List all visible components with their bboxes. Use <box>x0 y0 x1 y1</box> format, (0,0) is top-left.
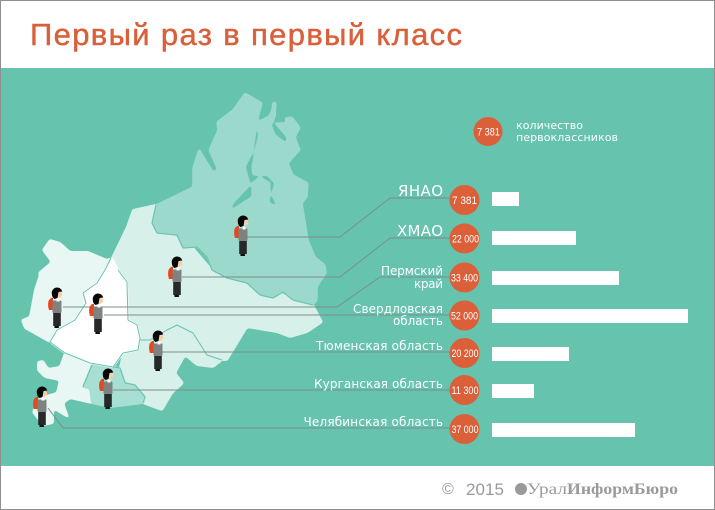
value circles <box>450 185 480 444</box>
values: 7 381 <box>452 195 477 207</box>
icon: child Тюменская область <box>149 331 163 371</box>
values: 33 400 <box>451 272 478 284</box>
values: 22 000 <box>452 234 479 246</box>
bar chart <box>492 192 688 437</box>
icon: child Свердловская область <box>89 294 103 334</box>
footer credit: 2015 <box>466 480 504 499</box>
label: Свердловская область: Свердловская <box>353 302 443 316</box>
label: Свердловская область <box>353 302 443 328</box>
values <box>451 195 479 436</box>
label: Пермский край: край <box>414 277 443 291</box>
region: Курганская область <box>83 365 145 407</box>
label: Курганская область: Курганская область <box>314 377 443 391</box>
region labels <box>304 182 443 429</box>
region: Челябинская область <box>33 353 92 425</box>
region: ХМАО <box>112 205 322 360</box>
leader lines <box>48 198 450 428</box>
label: Тюменская область: Тюменская область <box>315 339 443 353</box>
values: 37 000 <box>452 424 478 436</box>
icon: child ХМАО <box>168 257 182 297</box>
footer credit: Урал <box>527 481 567 498</box>
footer credit <box>442 480 678 499</box>
region: Тюменская область <box>120 325 222 410</box>
label: Челябинская область: Челябинская область <box>304 415 443 429</box>
legend: 7 381 <box>477 126 500 138</box>
legend: первоклассников <box>516 131 618 144</box>
values: 11 300 <box>452 385 478 397</box>
title: Первый раз в первый класс <box>30 17 462 52</box>
label: Свердловская область: область <box>393 314 443 328</box>
values: 20 200 <box>452 348 478 360</box>
label: Пермский край <box>381 264 443 291</box>
label: ХМАО: ХМАО <box>397 222 443 240</box>
region: Пермский край <box>22 240 112 342</box>
values: 52 000 <box>451 310 478 322</box>
figures: schoolchildren <box>33 216 248 427</box>
icon: child ЯНАО <box>234 216 248 256</box>
legend: количество <box>516 119 583 132</box>
region: ЯНАО <box>152 93 326 305</box>
legend <box>474 117 618 146</box>
icon: child Челябинская область <box>33 387 47 427</box>
label: ЯНАО: ЯНАО <box>398 182 443 200</box>
icon: child Курганская область <box>99 369 113 409</box>
footer credit: ИнформБюро <box>567 481 678 498</box>
footer credit: © <box>442 481 454 498</box>
icon: child Пермский край <box>48 288 62 328</box>
label: Пермский край: Пермский <box>381 264 443 278</box>
map of the Ural federal district <box>22 93 326 425</box>
region: Свердловская область <box>50 258 140 367</box>
